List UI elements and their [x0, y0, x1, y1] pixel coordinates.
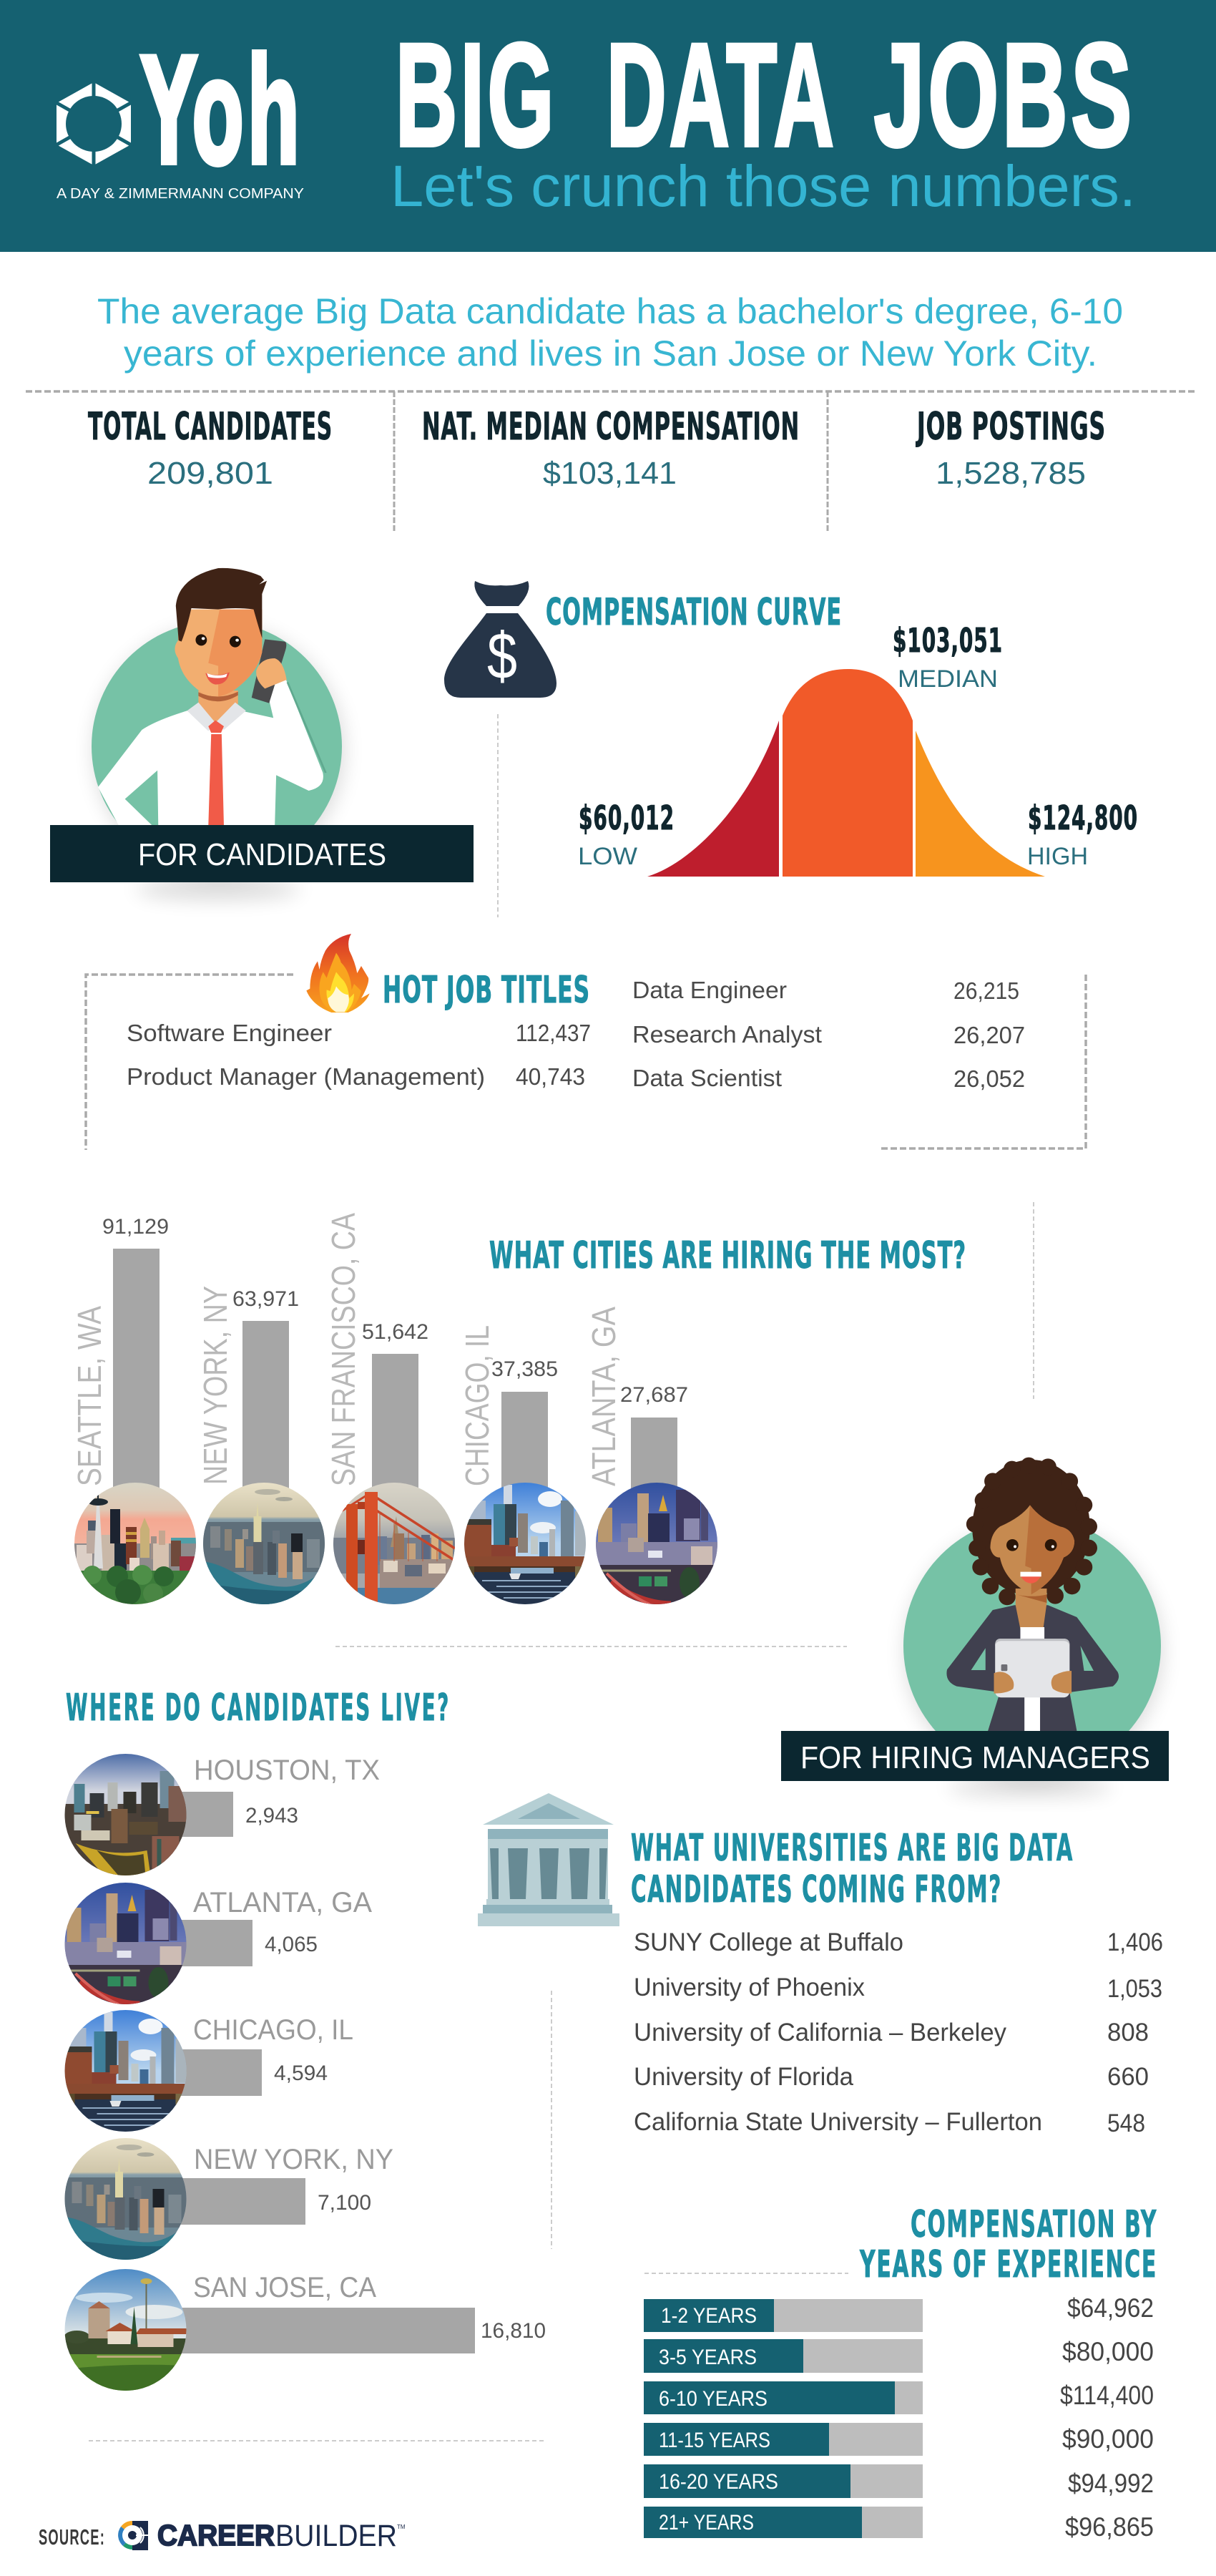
title: DATA: [607, 14, 837, 177]
row: New York: [64, 2138, 393, 2260]
row: San Jose: SAN JOSE, CA: [193, 2272, 376, 2303]
median label: MEDIAN: [898, 665, 998, 693]
row: Atlanta: [64, 1883, 372, 2004]
university list: 660: [1107, 2063, 1149, 2091]
row: 11-15 years: [644, 2423, 1154, 2456]
bar: Seattle: SEATTLE, WA: [71, 1306, 108, 1486]
heading: WHERE DO CANDIDATES LIVE?: [66, 1687, 451, 1729]
high label: HIGH: [1027, 843, 1088, 870]
row: 6-10 years: $114,400: [1060, 2381, 1154, 2410]
bar: New York: [197, 1286, 325, 1604]
panel: hot job titles: [86, 934, 1086, 1150]
panel: compensation by years of experience: [644, 2203, 1157, 2542]
university list: 1,053: [1107, 1975, 1162, 2003]
university list: California State University – Fullerton: [634, 2108, 1042, 2136]
panel: universities: [478, 1793, 1163, 2137]
job list left: 40,743: [516, 1063, 585, 1090]
intro text: [97, 291, 1123, 374]
bar: Seattle: [71, 1215, 196, 1605]
university list: University of California – Berkeley: [634, 2019, 1006, 2046]
subtitle: Let's crunch those numbers.: [391, 154, 1136, 219]
heading: COMPENSATION CURVE: [546, 591, 842, 634]
row: 1-2 years: 1-2 YEARS: [661, 2304, 757, 2328]
row: New York: NEW YORK, NY: [194, 2144, 393, 2175]
job list right: Research Analyst: [632, 1021, 822, 1048]
stat: total candidates: [88, 405, 333, 491]
university list: 808: [1107, 2019, 1149, 2046]
intro text: The average Big Data candidate has a bachelor's degree, 6-10: [97, 291, 1123, 331]
wordmark: TM: [397, 2524, 406, 2530]
row: 16-20 years: 16-20 YEARS: [659, 2470, 778, 2494]
row: 11-15 years: 11-15 YEARS: [659, 2429, 770, 2452]
row: 21+ years: 21+ YEARS: [659, 2511, 754, 2534]
stat: job postings: 1,528,785: [936, 456, 1086, 491]
icon: money bag: [444, 581, 556, 698]
icon: flame: [306, 934, 370, 1013]
row: New York: 7,100: [318, 2191, 371, 2215]
title: BIG: [396, 14, 557, 177]
bar: Chicago: [459, 1325, 586, 1604]
row: Chicago: [64, 2010, 353, 2132]
stat: median compensation: NAT. MEDIAN COMPENSATION: [422, 405, 800, 449]
row: Houston: 2,943: [245, 1804, 298, 1828]
high label: [1027, 799, 1138, 870]
university list: SUNY College at Buffalo: [634, 1928, 903, 1956]
logo wordmark: Yoh: [139, 26, 303, 200]
row: 16-20 years: $94,992: [1068, 2469, 1154, 2498]
row: 3-5 years: 3-5 YEARS: [659, 2346, 757, 2369]
bar: Atlanta: 27,687: [620, 1383, 688, 1407]
row: 3-5 years: $80,000: [1062, 2337, 1154, 2366]
bar: San Francisco: 51,642: [362, 1320, 428, 1344]
median label: $103,051: [893, 621, 1003, 660]
stat: total candidates: TOTAL CANDIDATES: [88, 405, 333, 449]
header band: [0, 0, 1216, 252]
row: 21+ years: $96,865: [1065, 2512, 1154, 2542]
university list: [634, 1928, 1163, 2137]
job list left: Product Manager (Management): [127, 1063, 485, 1090]
row: Atlanta: ATLANTA, GA: [193, 1887, 372, 1918]
panel: compensation curve: [444, 581, 1138, 877]
row: 16-20 years: [644, 2464, 1154, 2498]
job list right: 26,215: [953, 977, 1019, 1004]
heading: [631, 1827, 1074, 1911]
stat: total candidates: 209,801: [147, 456, 273, 491]
stat: job postings: [916, 405, 1106, 491]
bar: Atlanta: ATLANTA, GA: [585, 1307, 622, 1486]
row: Houston: HOUSTON, TX: [194, 1755, 380, 1786]
wordmark: [157, 2519, 406, 2553]
job list right: Data Scientist: [632, 1065, 782, 1091]
bar: Chicago: 37,385: [491, 1357, 558, 1381]
bar: San Francisco: SAN FRANCISCO, CA: [325, 1213, 362, 1486]
row: 6-10 years: 6-10 YEARS: [659, 2387, 768, 2411]
row: Chicago: CHICAGO, IL: [193, 2014, 353, 2046]
banner: for hiring managers: FOR HIRING MANAGERS: [800, 1740, 1150, 1775]
wordmark: CAREER: [157, 2519, 275, 2552]
row: Houston: [64, 1754, 380, 1875]
bar: Atlanta: [585, 1307, 717, 1604]
bar: New York: NEW YORK, NY: [197, 1286, 234, 1485]
heading: HOT JOB TITLES: [383, 969, 590, 1012]
panel: for hiring managers character: [781, 1458, 1169, 1795]
low label: [578, 799, 675, 870]
logo: Yoh hexagon: [54, 80, 133, 167]
banner: for candidates: FOR CANDIDATES: [138, 837, 386, 872]
job list left: [127, 1020, 591, 1090]
panel: for candidates character: [50, 568, 474, 899]
row: San Jose: [64, 2269, 546, 2391]
low label: LOW: [578, 843, 637, 870]
row: 21+ years: [644, 2507, 1154, 2542]
bell curve chart: [647, 669, 1045, 877]
job list right: Data Engineer: [632, 977, 787, 1003]
row: 11-15 years: $90,000: [1062, 2424, 1154, 2454]
university list: 1,406: [1107, 1928, 1163, 1956]
row: Chicago: 4,594: [274, 2062, 328, 2085]
wordmark: BUILDER: [275, 2519, 397, 2553]
panel: what cities are hiring: [71, 1213, 966, 1606]
job list left: Software Engineer: [127, 1020, 332, 1046]
source label: SOURCE:: [39, 2524, 105, 2550]
job list right: [632, 977, 1025, 1092]
low label: $60,012: [579, 799, 675, 837]
row: San Jose: 16,810: [481, 2319, 546, 2343]
bar: Seattle: 91,129: [102, 1215, 169, 1239]
bar: New York: 63,971: [232, 1287, 299, 1311]
row: 3-5 years: [644, 2337, 1154, 2373]
stat: median compensation: $103,141: [543, 456, 677, 491]
icon: careerbuilder logo: [118, 2521, 148, 2550]
title: [396, 14, 1135, 177]
job list left: 112,437: [516, 1020, 591, 1046]
banner: for hiring managers: [781, 1731, 1169, 1781]
university list: 548: [1107, 2109, 1145, 2137]
panel: where do candidates live: [64, 1687, 546, 2391]
bar: San Francisco: [325, 1213, 455, 1606]
row: 1-2 years: $64,962: [1067, 2293, 1154, 2323]
university list: University of Florida: [634, 2063, 854, 2091]
icon: woman with tablet: [946, 1458, 1119, 1732]
job list right: 26,207: [953, 1022, 1025, 1048]
icon: university building: [478, 1793, 619, 1926]
icon: man on phone: [98, 568, 325, 826]
source footer: [39, 2519, 406, 2553]
row: Atlanta: 4,065: [265, 1933, 318, 1956]
intro text: years of experience and lives in San Jose or New York City.: [124, 333, 1097, 374]
row: 6-10 years: [644, 2381, 1154, 2414]
median label: [893, 621, 1003, 693]
logo tagline: A DAY & ZIMMERMANN COMPANY: [57, 186, 304, 202]
high label: $124,800: [1028, 799, 1138, 837]
banner: for candidates: [50, 825, 474, 882]
heading: [859, 2203, 1157, 2286]
bar: Chicago: CHICAGO, IL: [459, 1325, 496, 1486]
stat: median compensation: [422, 405, 800, 491]
job list right: 26,052: [953, 1065, 1025, 1092]
university list: University of Phoenix: [634, 1974, 865, 2001]
row: 1-2 years: [644, 2293, 1154, 2332]
icon: money bag: $: [487, 620, 517, 693]
